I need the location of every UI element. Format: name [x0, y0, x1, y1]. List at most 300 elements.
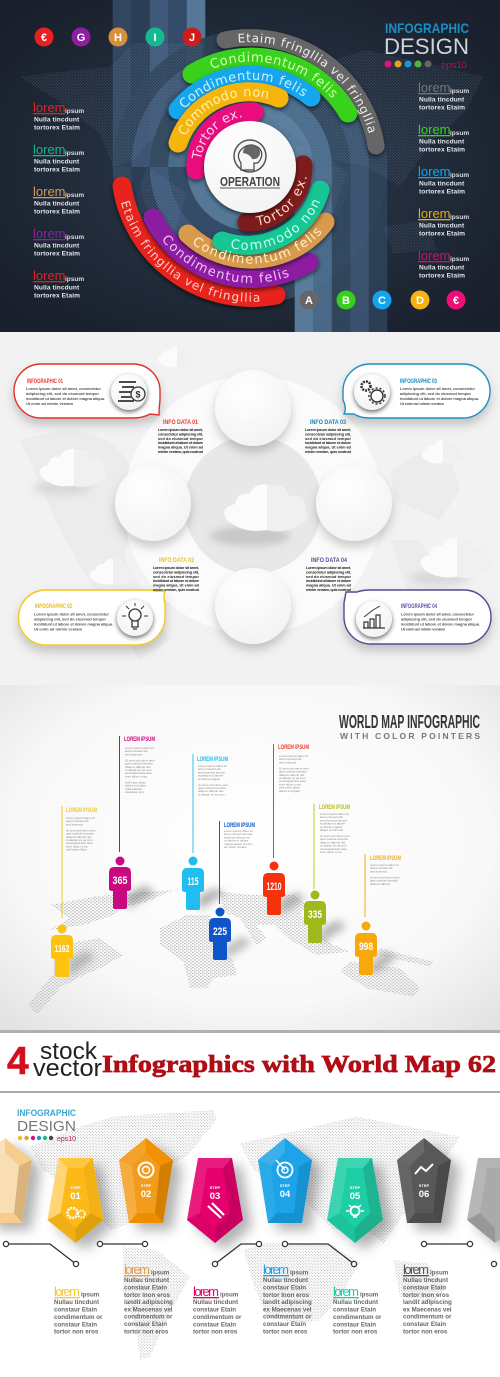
- text: step 04: ipsum: [290, 1270, 309, 1276]
- icon: target: [276, 1160, 292, 1178]
- pointer: 115 cyan: amet consect elit: [198, 767, 221, 771]
- callout: infographic 01: INFOGRAPHIC 01: [27, 378, 63, 385]
- pointer: 115 cyan: Ut enim ad minim veni: [198, 783, 228, 787]
- heading: infographic design: DESIGN: [17, 1118, 76, 1135]
- top letter badges: [34, 28, 202, 46]
- callout: infographic 01: incididunt ut labore et dolore magna aliqua.: [26, 396, 105, 401]
- top letter badges: J: [189, 32, 195, 44]
- callout: infographic 04: Ut enim ad minim veniam: [401, 626, 445, 632]
- left text list: ipsum: [65, 192, 84, 199]
- pointer: 998 orange: amet consect elit: [370, 866, 393, 870]
- callout: infographic 03: Lorem ipsum dolor sit amet, consectetur: [400, 386, 475, 391]
- pointer: 225 blue: magna aliqua ut enim: [224, 842, 253, 846]
- callout: infographic 03: [343, 364, 490, 418]
- right text list: ipsum: [450, 214, 469, 221]
- text: step 05: Nullau tincdunt: [333, 1299, 378, 1306]
- pointer: 1210 red: [263, 744, 309, 915]
- pointer: 998 orange: Ut enim ad minim veni: [370, 875, 400, 879]
- pointer: 1162 yellow: sed eiusmod: [66, 822, 83, 826]
- icon: gears: [68, 1208, 85, 1218]
- icon: bulb: [346, 1205, 364, 1217]
- info data 01: magna aliqua. Ut enim ad: [158, 446, 204, 450]
- pointer: 365 magenta: Lorem ipsum dolor sit: [125, 746, 154, 750]
- icon: coins and dollar: $: [135, 390, 141, 400]
- callout: infographic 04: adipiscing elit, sed do eiusmod tempor: [401, 616, 472, 622]
- text: step 04: condimentum or: [263, 1314, 312, 1320]
- top letter badges: I: [153, 32, 157, 44]
- text: step 06: tortor lnon eros: [403, 1292, 450, 1299]
- pointer: 115 cyan: Lorem ipsum dolor sit: [198, 764, 227, 768]
- logo: [7, 1038, 102, 1083]
- pointer: 335 green: [304, 804, 350, 943]
- gem: step 01 yellow: [48, 1158, 104, 1243]
- left text list: tortorex Etaim: [34, 166, 80, 174]
- info data 03: [305, 419, 352, 454]
- callout: infographic 03: adipiscing elit, sed do eiusmod tempor: [400, 391, 471, 396]
- pointer: 365 magenta: LOREM IPSUM: [124, 736, 155, 743]
- left text list: lorem: [33, 226, 66, 241]
- pointer: 1162 yellow: ullamco laboris nisi: [66, 835, 92, 839]
- callout: infographic 04: Lorem ipsum dolor sit amet, consectetur: [401, 612, 474, 616]
- text: step 02: [124, 1262, 173, 1336]
- info data 04: consectetur adipiscing elit,: [306, 570, 351, 574]
- right text list: ipsum: [450, 172, 469, 179]
- pointer: 1162 yellow: 1162: [54, 944, 70, 955]
- text: step 05: constaur Etain: [333, 1322, 376, 1328]
- icon: rising bar chart: [356, 601, 392, 637]
- gem: step 06 grey: [397, 1138, 451, 1223]
- left text list: tortorex Etaim: [34, 124, 80, 132]
- heading: infographic design: DESIGN: [384, 34, 469, 59]
- left text list: ipsum: [65, 108, 84, 115]
- callout: infographic 02: adipiscing elit, sed do eiusmod tempor: [34, 616, 106, 622]
- text: step 02: lorem: [124, 1262, 150, 1277]
- text: step 06: landit adipiscing: [403, 1299, 452, 1306]
- gem: step 04 blue: STEP: [280, 1183, 291, 1188]
- text: step 02: landit adipiscing: [124, 1299, 173, 1306]
- pointer: 115 cyan: ullamco laboris nisi: [198, 789, 224, 793]
- pointer: 225 blue: amet consect elit sed: [224, 832, 253, 836]
- left text list: [33, 100, 84, 300]
- pointer: 365 magenta: sed eiusmod: [125, 752, 142, 756]
- pointer: 1162 yellow: velit esse cillum: [66, 848, 88, 852]
- text: step 03: Nullau tincdunt: [193, 1299, 238, 1306]
- pointer: 115 cyan: incididunt ut labore: [198, 774, 224, 778]
- pointer: 115 cyan: ut aliquip ex ea com: [198, 792, 225, 796]
- text: step 03: [193, 1284, 242, 1336]
- callout: infographic 02: Ut enim ad minim veniam: [34, 626, 82, 632]
- right text list: lorem: [418, 80, 451, 95]
- gem: step 03 pink: STEP: [210, 1185, 221, 1190]
- pointer: 1162 yellow: amet consect elit: [66, 819, 89, 823]
- info data 04: Lorem ipsum dolor sit amet,: [306, 566, 351, 570]
- pointer: 365 magenta: consequat duis aute: [125, 771, 152, 775]
- pointer: 1162 yellow: ut aliquip ex ea com: [66, 838, 93, 842]
- info data 02: minim veniam, quis nostrud: [153, 588, 200, 592]
- left text list: lorem: [33, 184, 66, 199]
- callout: infographic 03: incididunt ut labore et dolore magna aliqua.: [400, 396, 479, 401]
- top letter badges: G: [77, 32, 85, 44]
- pointer: 335 green: Lorem ipsum dolor sit: [320, 812, 349, 816]
- gem: step 05 teal: 05: [350, 1191, 361, 1202]
- gem: step 05 teal: STEP: [350, 1185, 361, 1190]
- logo: 4: [7, 1040, 29, 1083]
- connector lines: [3, 1241, 497, 1267]
- text: step 05: constaur Etain: [333, 1306, 376, 1314]
- callout: infographic 01: Lorem ipsum dolor sit amet, consectetur: [26, 386, 101, 391]
- text: step 01: lorem: [54, 1284, 80, 1299]
- pointer: 335 green: ullamco laboris nisi: [320, 840, 346, 844]
- pointer: 365 magenta: [109, 736, 155, 909]
- gem: step 06 grey: 06: [419, 1189, 429, 1200]
- pointer: 1210 red: ut aliquip ex ea com: [279, 776, 306, 780]
- pointer: 1162 yellow: [51, 806, 97, 977]
- pointer: 335 green: sed eiusmod tempor: [320, 818, 347, 822]
- gem: step 01 yellow: 01: [70, 1191, 81, 1202]
- text: step 04: ex Maecenas vel: [263, 1306, 312, 1314]
- left text list: ipsum: [65, 234, 84, 241]
- right text list: Nulla tincdunt: [419, 222, 465, 230]
- info data 01: minim veniam, quis nostrud: [158, 450, 204, 454]
- info data 02: Lorem ipsum dolor sit amet,: [153, 566, 199, 570]
- pointer: 225 blue: 225: [213, 926, 227, 938]
- panel: white circle diagram: [0, 332, 500, 685]
- pointer: 335 green: LOREM IPSUM: [319, 804, 350, 811]
- text: step 03: tortor non eros: [193, 1328, 238, 1336]
- callout: infographic 02: Lorem ipsum dolor sit amet, consectetur: [34, 612, 109, 616]
- pointer: 365 magenta: irure dolor in rep: [125, 774, 147, 778]
- left text list: lorem: [33, 268, 66, 283]
- upper spiral bands: Condimentum felis: [210, 52, 337, 98]
- right text list: [418, 80, 469, 280]
- lower spiral bands: Etaim fringllia vel fringllia: [121, 200, 260, 304]
- pointer: 1162 yellow: irure dolor in rep: [66, 844, 88, 848]
- text: step 04: Nullau tincdunt: [263, 1277, 308, 1284]
- info data 03: incididunt ut labore et dolore: [305, 441, 351, 445]
- pointer: 365 magenta: ullamco laboris nisi: [125, 765, 151, 769]
- isometric dotted map: [28, 890, 433, 1015]
- top letter badges: €: [41, 32, 47, 44]
- lower spiral bands: Condimentum felis: [163, 236, 289, 283]
- icon: head with brain: [234, 140, 266, 172]
- info data 01: Lorem ipsum dolor sit amet,: [158, 428, 203, 432]
- info data 02: incididunt ut labore et dolore: [153, 579, 199, 583]
- text: step 05: lorem: [333, 1284, 359, 1299]
- text: step 02: tortor non eros: [124, 1328, 169, 1336]
- pointer: 998 orange: 998: [359, 941, 373, 953]
- pointer: 225 blue: Lorem ipsum dolor sit: [224, 829, 253, 833]
- text: step 06: constaur Etain: [403, 1284, 446, 1292]
- bottom letter badges: B: [342, 295, 350, 307]
- pointer: 335 green: consequat duis aute: [320, 847, 347, 851]
- icon: coins and dollar: [111, 374, 147, 410]
- pointer: 365 magenta: quis nostrud exercita: [125, 762, 153, 766]
- right text list: Nulla tincdunt: [419, 180, 465, 188]
- bottom letter badges: A: [305, 295, 313, 307]
- upper spiral bands: Condimentum felis: [180, 70, 307, 108]
- icon: coin: [138, 1162, 154, 1178]
- bottom letter badges: [300, 290, 466, 310]
- text: step 06: constaur Etain: [403, 1321, 446, 1328]
- callout: infographic 04: incididunt ut labore et dolore magna aliqua.: [401, 622, 480, 626]
- text: step 04: tortor non eros: [263, 1328, 308, 1336]
- text: step 01: Nullau tincdunt: [54, 1299, 99, 1306]
- pointer: 1210 red: irure dolor in rep: [279, 782, 301, 786]
- left text list: Nulla tincdunt: [34, 200, 80, 208]
- callout: infographic 03: INFOGRAPHIC 03: [400, 378, 437, 385]
- right text list: ipsum: [450, 88, 469, 95]
- text: step 05: ipsum: [360, 1292, 379, 1298]
- gem: step 02 orange: 02: [141, 1189, 151, 1200]
- text: step 03: constaur Etain: [193, 1306, 236, 1314]
- text: step 02: ipsum: [151, 1270, 170, 1276]
- pointer: 1210 red: amet consect elit: [279, 757, 302, 761]
- heading: infographic design: INFOGRAPHIC: [385, 21, 469, 36]
- pointer: 365 magenta: Ut enim ad minim veni: [125, 758, 155, 762]
- gem: step 03 pink: 03: [210, 1191, 220, 1202]
- text: step 06: tortor non eros: [403, 1328, 448, 1336]
- pointer: 365 magenta: 365: [112, 875, 128, 887]
- title: Infographics with World Map 62: [102, 1052, 496, 1078]
- pointer: 1210 red: ullamco laboris nisi: [279, 773, 305, 777]
- gem: step 02 orange: STEP: [141, 1183, 152, 1188]
- right text list: tortorex Etaim: [419, 230, 465, 238]
- text: step 04: constaur Etain: [263, 1284, 306, 1292]
- heading: world map infographic: [339, 712, 480, 741]
- pointer: 1210 red: quis nostrud exercita: [279, 770, 307, 774]
- text: step 06: lorem: [403, 1262, 429, 1277]
- upper spiral bands: [166, 29, 386, 184]
- callout: infographic 01: adipiscing elit, sed do eiusmod tempor: [26, 391, 99, 396]
- gem: step 03 pink: [187, 1158, 243, 1243]
- pointer: 365 magenta: nulla pariatur: [125, 787, 142, 791]
- text: step 05: [333, 1284, 382, 1336]
- right text list: lorem: [418, 248, 451, 263]
- label: operation: OPERATION: [220, 174, 280, 189]
- callout: infographic 02: incididunt ut labore et dolore magna aliqua.: [34, 622, 113, 626]
- text: step 04: lorem: [263, 1262, 289, 1277]
- gem: step 04 blue: 04: [280, 1189, 291, 1200]
- text: step 02: condimentum or: [124, 1314, 173, 1320]
- text: step 04: landit adipiscing: [263, 1299, 312, 1306]
- pointer: 335 green: et dolore magna: [320, 825, 342, 829]
- pointer: 998 orange: Lorem ipsum dolor sit: [370, 863, 399, 867]
- right text list: tortorex Etaim: [419, 104, 465, 112]
- text: step 06: Nullau tincdunt: [403, 1277, 448, 1284]
- bottom letter badges: D: [416, 295, 424, 307]
- panel: dark operation infographic: [0, 0, 500, 332]
- logo: vector: [33, 1055, 102, 1082]
- heading: infographic design: eps10: [441, 60, 467, 71]
- gem: right grey partial: [467, 1158, 500, 1243]
- pointer: 335 green: amet consect elit: [320, 815, 343, 819]
- text: step 06: condimentum or: [403, 1314, 452, 1320]
- pointer: 365 magenta: amet consect elit: [125, 749, 148, 753]
- text: step 02: constaur Etain: [124, 1321, 167, 1328]
- text: step 04: constaur Etain: [263, 1321, 306, 1328]
- gem: step 06 grey: STEP: [419, 1183, 430, 1188]
- right text list: tortorex Etaim: [419, 272, 465, 280]
- info data 04: sed do eiusmod tempor: [306, 575, 352, 579]
- right text list: Nulla tincdunt: [419, 264, 465, 272]
- info data 03: minim veniam, quis nostrud: [305, 450, 352, 454]
- text: step 01: constaur Etain: [54, 1306, 97, 1314]
- pointer: 998 orange: sed eiusmod: [370, 869, 387, 873]
- banner: 4 stock vector title: [0, 1030, 500, 1093]
- text: step 01: ipsum: [81, 1292, 100, 1298]
- text: step 01: constaur Etain: [54, 1322, 97, 1328]
- heading: infographic design: [384, 21, 469, 71]
- text: step 03: constaur Etain: [193, 1322, 236, 1328]
- right text list: ipsum: [450, 130, 469, 137]
- pointer: 335 green: 335: [308, 909, 322, 921]
- info data 02: magna aliqua. Ut enim ad: [153, 584, 200, 588]
- left text list: lorem: [33, 100, 66, 115]
- pointer: 1210 red: Ut enim ad minim veni: [279, 766, 309, 770]
- dotted world map: [30, 1110, 460, 1360]
- text: step 06: ex Maecenas vel: [403, 1306, 452, 1314]
- info data 03: Lorem ipsum dolor sit amet,: [305, 428, 351, 432]
- right text list: ipsum: [450, 256, 469, 263]
- right text list: lorem: [418, 206, 451, 221]
- decorative stripes and rings: right set: [122, 39, 378, 332]
- left text list: Nulla tincdunt: [34, 242, 80, 250]
- panel: gem step infographic: [0, 1093, 500, 1377]
- info data 04: magna aliqua. Ut enim ad: [306, 584, 352, 588]
- dotted world map: [20, 43, 483, 260]
- callout: infographic 04: [344, 590, 491, 644]
- text: step 03: condimentum or: [193, 1314, 242, 1321]
- pointer: 225 blue: LOREM IPSUM: [224, 822, 255, 829]
- left text list: Nulla tincdunt: [34, 158, 80, 166]
- pointer: 998 orange: [355, 854, 401, 975]
- top letter badges: H: [114, 32, 122, 44]
- callout: infographic 04: INFOGRAPHIC 04: [401, 603, 437, 610]
- text: step 03: ipsum: [220, 1292, 239, 1298]
- text: step 06: [403, 1262, 452, 1336]
- pointer: 115 cyan: 115: [188, 876, 198, 888]
- heading: infographic design: INFOGRAPHIC: [17, 1108, 76, 1118]
- pointer: 1210 red: Lorem ipsum dolor sit: [279, 754, 308, 758]
- panel: world map with color pointers: [0, 685, 500, 1030]
- pointer: 998 orange: quis nostrud exercita: [370, 879, 398, 883]
- left text list: tortorex Etaim: [34, 208, 80, 216]
- text: step 05: tortor non eros: [333, 1328, 378, 1336]
- text: step 01: [54, 1284, 103, 1336]
- pointer: 115 cyan: [182, 754, 228, 910]
- pointer: 1210 red: consequat duis aute: [279, 779, 306, 783]
- info data 01: incididunt ut labore et dolore: [158, 441, 203, 445]
- text: step 02: Nullau tincdunt: [124, 1277, 169, 1284]
- info data 04: minim veniam, quis nostrud: [306, 588, 352, 592]
- info data 03: INFO DATA 03: [310, 419, 346, 426]
- upper spiral bands: Tortor ex.: [192, 111, 242, 158]
- gem: step 04 blue: [258, 1138, 312, 1223]
- pointer: 335 green: Ut enim ad minim veni: [320, 834, 350, 838]
- pointer: 365 magenta: velit esse cillum: [125, 780, 147, 784]
- info data 02: sed do eiusmod tempor: [153, 575, 200, 579]
- info data 01: consectetur adipiscing elit,: [158, 432, 203, 436]
- right text list: Nulla tincdunt: [419, 96, 465, 104]
- info data 01: [158, 419, 204, 454]
- pointer: 115 cyan: et dolore magna: [198, 777, 220, 781]
- gem: step 02 orange: [119, 1138, 173, 1223]
- faint world map: [20, 430, 460, 660]
- text: step 02: constaur Etain: [124, 1284, 167, 1292]
- icon: trend line: [415, 1164, 433, 1174]
- left text list: tortorex Etaim: [34, 250, 80, 258]
- info data 03: consectetur adipiscing elit,: [305, 432, 351, 436]
- text: step 03: lorem: [193, 1284, 219, 1299]
- pointer: 335 green: aliqua ut enim ad: [320, 828, 343, 832]
- text: step 04: [263, 1262, 312, 1336]
- pointer: 335 green: irure dolor in rep: [320, 850, 342, 854]
- text: step 01: condimentum or: [54, 1314, 103, 1321]
- pointer: 1210 red: sed eiusmod: [279, 760, 296, 764]
- clouds: [32, 346, 492, 585]
- icon: light bulb: [117, 600, 153, 636]
- callout: infographic 01: Ut enim ad minim veniam: [26, 401, 73, 406]
- pointer: 115 cyan: LOREM IPSUM: [197, 756, 228, 763]
- lower spiral bands: Commodo non: [232, 200, 320, 250]
- pointer: 335 green: ut aliquip ex ea com: [320, 844, 347, 848]
- left text list: lorem: [33, 142, 66, 157]
- pointer: 365 magenta: excepteur sint: [125, 790, 144, 794]
- pointer: 1162 yellow: Ut enim ad minim veni: [66, 828, 96, 832]
- callout: infographic 01: [14, 364, 160, 418]
- text: step 01: tortor non eros: [54, 1328, 99, 1336]
- text: step 06: ipsum: [430, 1270, 449, 1276]
- lower spiral bands: Condimentum felis: [194, 228, 322, 264]
- info data 01: INFO DATA 01: [163, 419, 198, 426]
- decorative stripes and rings: left set: [122, 0, 378, 295]
- pointer: 998 orange: LOREM IPSUM: [370, 855, 401, 862]
- heading: world map infographic: WITH COLOR POINTERS: [340, 731, 480, 741]
- callout: infographic 03: Ut enim ad minim veniam: [400, 401, 444, 406]
- lower spiral bands: [111, 154, 336, 310]
- info data 01: sed do eiusmod tempor: [158, 437, 204, 441]
- info data 02: consectetur adipiscing elit,: [153, 570, 199, 574]
- pointer: 1162 yellow: LOREM IPSUM: [66, 807, 97, 814]
- lower spiral bands: Tortor ex.: [255, 177, 307, 226]
- gem: step 01 yellow: STEP: [70, 1185, 81, 1190]
- bottom letter badges: C: [378, 295, 386, 307]
- icon: gears: [354, 374, 390, 410]
- info data 02: [153, 557, 200, 592]
- pointer: 1210 red: LOREM IPSUM: [278, 744, 309, 751]
- left text list: Nulla tincdunt: [34, 116, 80, 124]
- left text list: ipsum: [65, 150, 84, 157]
- pointer: 335 green: quis nostrud exercita: [320, 837, 348, 841]
- info data 02: INFO DATA 02: [159, 557, 194, 564]
- info data 04: [306, 557, 352, 592]
- left text list: Nulla tincdunt: [34, 284, 80, 292]
- callout: infographic 02: INFOGRAPHIC 02: [35, 603, 72, 610]
- pointer: 1162 yellow: Lorem ipsum dolor sit: [66, 816, 95, 820]
- pointer: 1162 yellow: consequat duis aute: [66, 841, 93, 845]
- right text list: lorem: [418, 122, 451, 137]
- text: step 04: tortor lnon eros: [263, 1292, 310, 1299]
- upper spiral bands: Etaim fringllia vel fringllia: [238, 34, 375, 133]
- gem: step 05 teal: [327, 1158, 383, 1243]
- icon: tools: [208, 1203, 224, 1218]
- left text list: tortorex Etaim: [34, 292, 80, 300]
- pointer: 335 green: incididunt ut labore: [320, 822, 346, 826]
- bottom letter badges: €: [453, 295, 459, 307]
- callout: infographic 02: [18, 590, 165, 645]
- pointer: 1210 red: velit esse cillum: [279, 786, 301, 790]
- info data 03: magna aliqua. Ut enim ad: [305, 446, 352, 450]
